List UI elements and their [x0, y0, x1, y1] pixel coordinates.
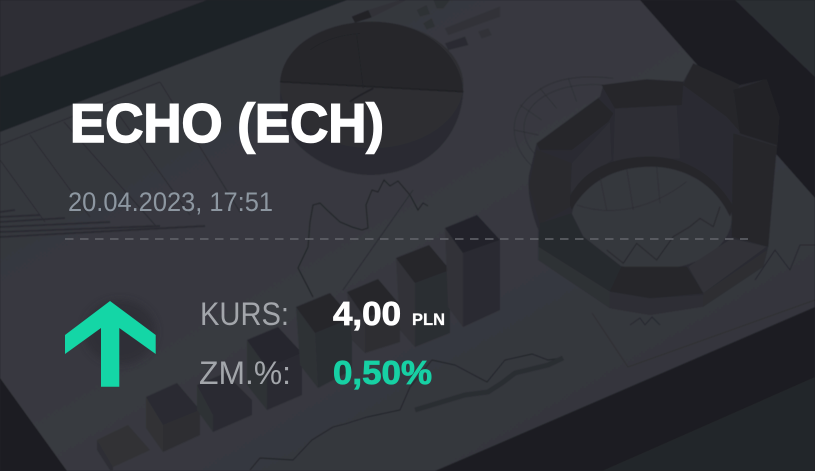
- ring front segment: [610, 267, 703, 298]
- ring back inner walls: [613, 105, 680, 162]
- hatched histogram: [0, 210, 205, 237]
- label: KURS: KURS:: [200, 296, 289, 332]
- value: percent change: 0,50%: [333, 354, 432, 391]
- bar 4: [247, 327, 302, 410]
- top-left dark band: [0, 0, 347, 132]
- ring raised right segments: [683, 63, 740, 132]
- bar chart: [97, 215, 500, 471]
- date and time: 20.04.2023, 17:51: [68, 187, 273, 217]
- bottom desk: [435, 307, 815, 471]
- ring top segments: [602, 79, 683, 108]
- pie chart: [280, 22, 463, 175]
- hatched volume band: [415, 358, 563, 410]
- value: price: 4,00: [333, 295, 401, 332]
- bar 1: [97, 425, 150, 471]
- bar 7: [396, 245, 450, 347]
- stock line charts: [250, 180, 815, 470]
- circular grid: [514, 77, 613, 170]
- icon: up arrow: [65, 300, 156, 387]
- bar 8: [445, 215, 500, 327]
- ring front-left wall: [538, 213, 622, 292]
- left grid lines: [0, 82, 240, 225]
- value: price: PLN: [412, 311, 445, 329]
- top small bars: [352, 0, 500, 50]
- bar 6: [347, 279, 400, 353]
- top-right dark band: [640, 0, 815, 198]
- value: price: [333, 295, 445, 332]
- title: ECHO (ECH): [70, 92, 384, 154]
- bar 5: [296, 293, 352, 388]
- ring hole floor: [572, 167, 732, 270]
- ring chart: [528, 63, 779, 315]
- bar 3: [197, 373, 252, 432]
- label: ZM.%: ZM.%:: [199, 355, 291, 391]
- bar 2: [146, 383, 200, 452]
- chart inside ring: [607, 207, 720, 263]
- dashed divider: [65, 238, 748, 240]
